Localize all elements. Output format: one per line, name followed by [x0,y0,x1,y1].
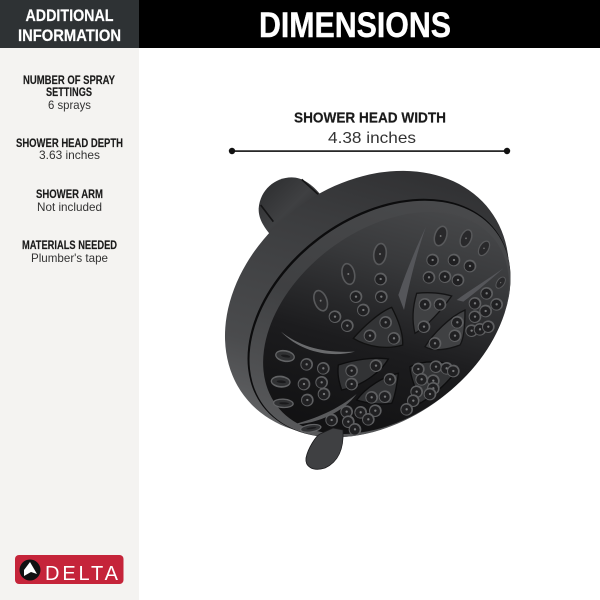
dimension arrow: width line [229,148,510,154]
head body [173,116,561,490]
spec: materials needed: MATERIALS NEEDED [22,238,117,252]
head face [221,166,551,480]
head groove [202,149,556,487]
spec: number of spray settings: NUMBER OF SPRAY [23,73,115,87]
spec: number of spray settings: SETTINGS [46,85,92,99]
sidebar heading: additional information: ADDITIONAL [26,6,114,25]
round jets [374,273,387,285]
sidebar heading: additional information [0,0,139,48]
spec: number of spray settings: 6 sprays [48,98,91,112]
lever tab [306,428,343,469]
panel: sidebar [0,0,139,600]
logo: delta: DELTA [45,563,119,585]
spec: number of spray settings [23,73,115,112]
title banner: dimensions [139,0,600,48]
title banner: dimensions: DIMENSIONS [259,6,451,45]
dimension label: shower head width: 4.38 inches [328,130,416,147]
spec: shower head depth: SHOWER HEAD DEPTH [16,136,123,150]
head inner band [204,152,556,486]
spec: shower head depth [16,136,123,162]
product: shower head [173,116,561,490]
triangular pads [353,307,403,347]
dimension label: shower head width [294,110,446,147]
logo: delta [15,555,124,585]
spec: shower arm: SHOWER ARM [36,187,103,201]
oval jets [371,242,389,266]
sidebar heading: additional information: INFORMATION [18,26,121,45]
nozzles and pads [270,224,508,436]
spec: shower arm [36,187,103,214]
spec: materials needed: Plumber's tape [31,251,108,265]
spec: materials needed [22,238,117,265]
spec: shower arm: Not included [37,200,102,214]
sweeping ribs [281,332,355,354]
spec: shower head depth: 3.63 inches [39,148,100,162]
shower arm connector [259,177,322,238]
dimension label: shower head width: SHOWER HEAD WIDTH [294,110,446,126]
